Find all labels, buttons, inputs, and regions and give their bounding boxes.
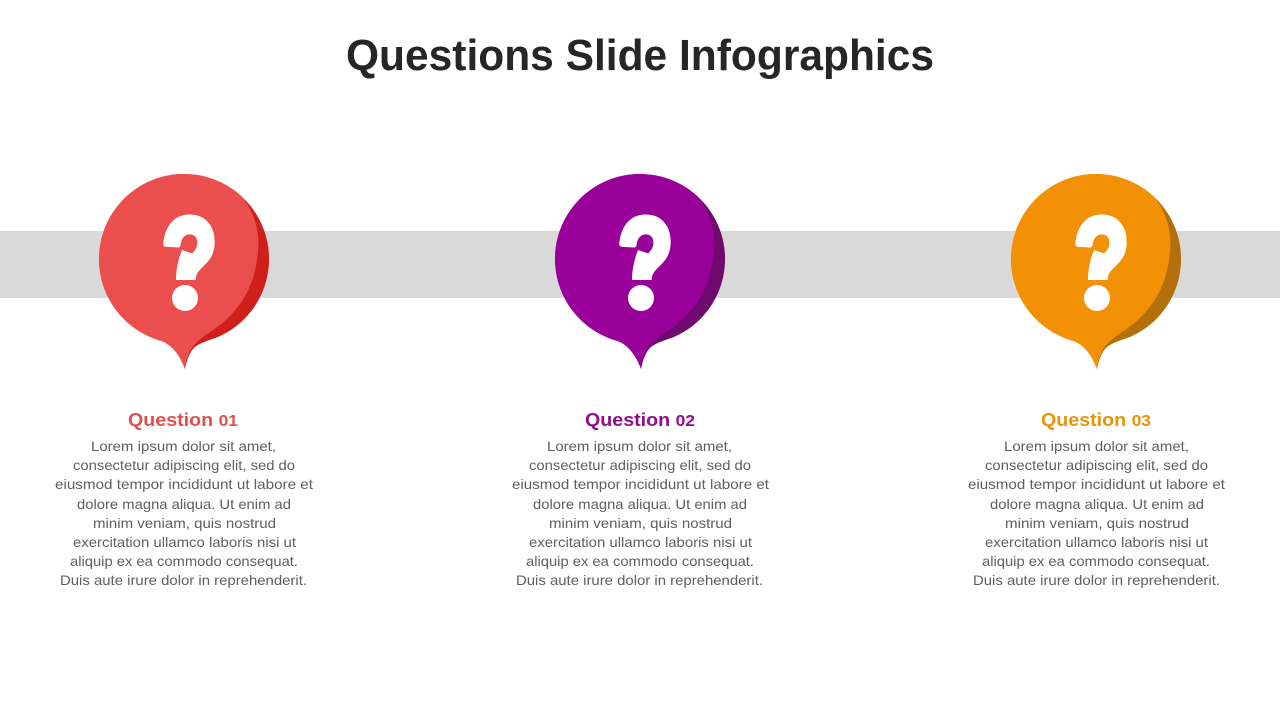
text block: question 03 body: exercitation ullamco laboris nisi ut [985,534,1208,550]
text block: question 02 body: consectetur adipiscing elit, sed do [529,457,751,473]
text block: question 03 body: Lorem ipsum dolor sit amet, [1004,438,1189,454]
text block: question 02 body: dolore magna aliqua. Ut enim ad [533,496,747,512]
text block: question 02 body: exercitation ullamco laboris nisi ut [529,534,752,550]
text block: question 03 body: consectetur adipiscing elit, sed do [985,457,1208,473]
icon: orange question pin: ? [1073,192,1130,332]
icon: orange question pin [1011,174,1181,369]
text block: question 02 body: aliquip ex ea commodo consequat. [526,553,754,569]
text block: question 03 body: eiusmod tempor incididunt ut labore et [968,476,1225,492]
text block: question 02 body: eiusmod tempor incididunt ut labore et [512,476,769,492]
icon: red question pin [99,174,269,369]
text block: question 01 body: eiusmod tempor incididunt ut labore et [55,476,313,492]
text block: question 01 body: exercitation ullamco laboris nisi ut [73,534,296,550]
text block: question 02 body: Lorem ipsum dolor sit amet, [547,438,732,454]
text block: question 03 body: minim veniam, quis nostrud [1005,515,1189,531]
text block: question 01 body: dolore magna aliqua. Ut enim ad [77,496,291,512]
panel: question 01 [55,174,313,588]
text block: question 03 body: aliquip ex ea commodo consequat. [982,553,1210,569]
text block: question 02 body [512,438,769,588]
heading: question 02: Question 02 [585,410,695,430]
heading: question 03: Question 03 [1041,410,1151,430]
text block: question 01 body: Lorem ipsum dolor sit amet, [91,438,276,454]
text block: question 01 body: minim veniam, quis nostrud [93,515,276,531]
heading: question 01: Question 01 [128,410,238,430]
grey horizontal band [0,231,1280,298]
text block: question 03 body [968,438,1225,588]
panel: question 03 [968,174,1225,588]
text block: question 01 body: aliquip ex ea commodo consequat. [70,553,298,569]
icon: red question pin: ? [161,192,218,332]
text block: question 03 body: Duis aute irure dolor in reprehenderit. [973,572,1220,588]
icon: purple question pin [555,174,725,369]
text block: question 01 body: Duis aute irure dolor in reprehenderit. [60,572,307,588]
text block: question 03 body: dolore magna aliqua. Ut enim ad [990,496,1204,512]
text block: question 02 body: Duis aute irure dolor in reprehenderit. [516,572,763,588]
title: Questions Slide Infographics [346,31,934,80]
text block: question 01 body: consectetur adipiscing elit, sed do [73,457,295,473]
text block: question 02 body: minim veniam, quis nostrud [549,515,732,531]
panel: question 02 [512,174,769,588]
text block: question 01 body [55,438,313,588]
icon: purple question pin: ? [617,192,674,332]
